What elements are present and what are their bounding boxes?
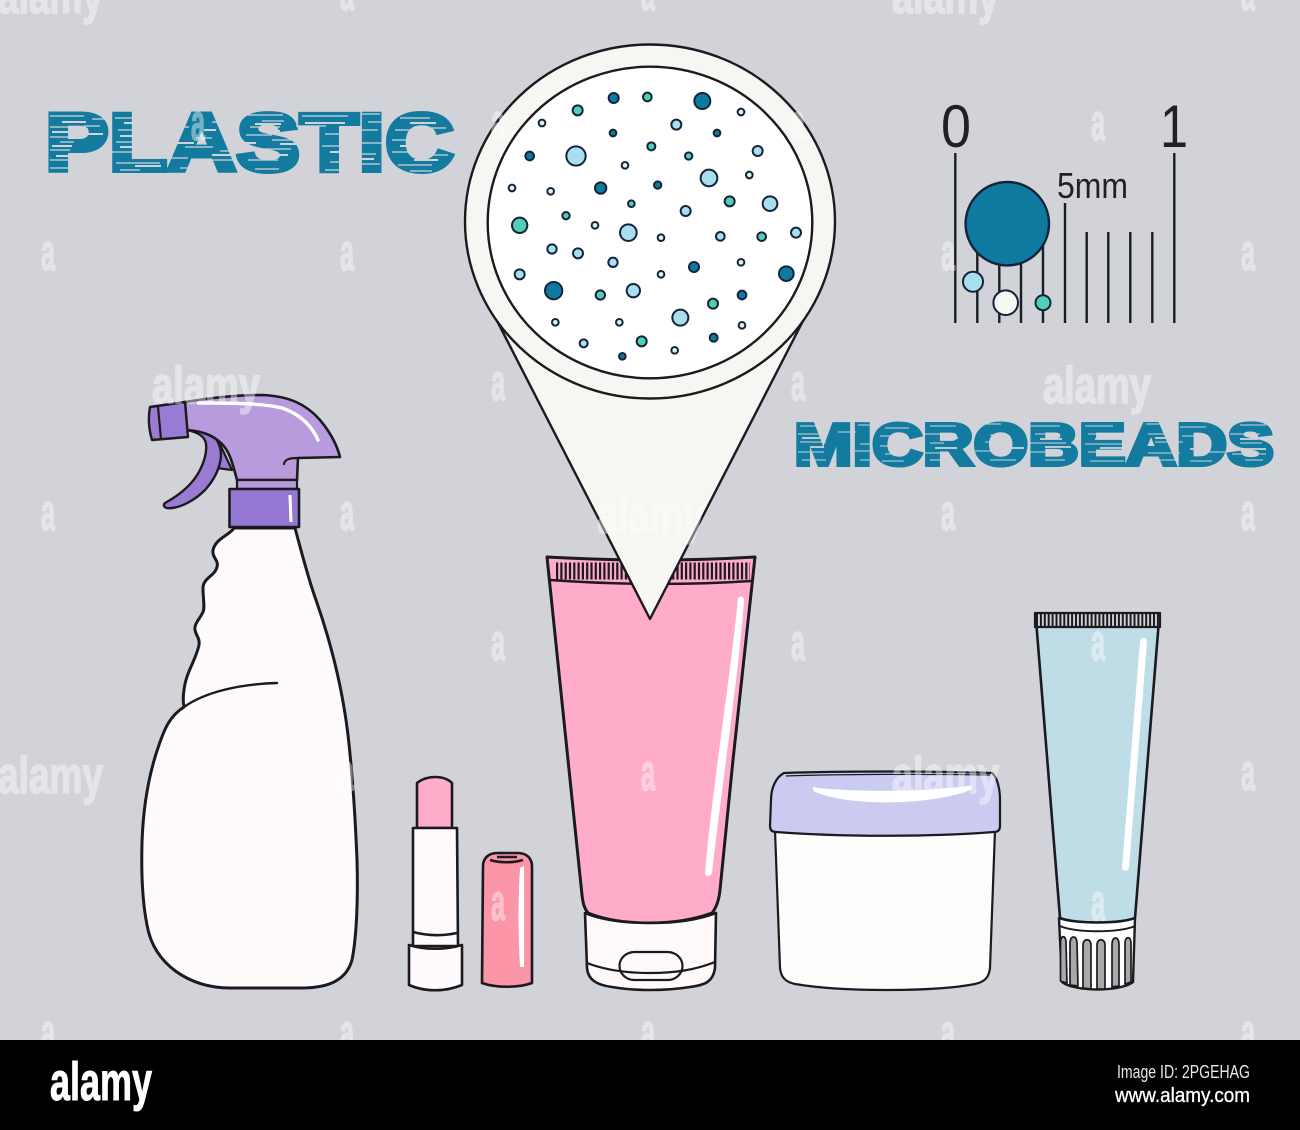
watermark pattern: a [641, 1004, 656, 1062]
lid highlight [813, 786, 972, 802]
trigger lever [164, 428, 221, 508]
watermark pattern: a [191, 94, 206, 152]
footer band [0, 1040, 1300, 1130]
tube cap [585, 913, 716, 990]
watermark pattern: alamy [597, 487, 704, 545]
collar neck [237, 480, 297, 489]
watermark pattern: a [1091, 874, 1106, 932]
watermark pattern: a [941, 484, 956, 542]
ruler tick marks [955, 153, 1174, 323]
watermark pattern: a [491, 614, 506, 672]
watermark pattern: a [791, 94, 806, 152]
toothpaste cap [1059, 918, 1135, 990]
watermark pattern: a [1241, 484, 1256, 542]
watermark pattern: a [340, 484, 355, 542]
tube crimp line [550, 580, 751, 584]
watermark pattern: a [1241, 1004, 1256, 1062]
nozzle [149, 402, 188, 440]
cap opening [490, 857, 523, 862]
tube body [547, 557, 755, 923]
watermark pattern: a [941, 1004, 956, 1062]
scale ruler [941, 93, 1188, 323]
pink tube [547, 557, 755, 990]
watermark pattern: a [641, 744, 656, 802]
teal beads [512, 93, 766, 346]
cap ribs [1060, 937, 1131, 989]
toothpaste crimp [1035, 613, 1160, 627]
stick base [409, 945, 462, 990]
ruler label 0: 0 [941, 93, 971, 160]
title: MICROBEADS: MICROBEADS [794, 412, 1274, 478]
balm bullet [417, 777, 452, 828]
cap ring line [1060, 926, 1135, 931]
watermark pattern: a [1091, 614, 1106, 672]
watermark pattern: a [1241, 744, 1256, 802]
jar body [775, 830, 995, 990]
ruler label 1: 1 [1160, 93, 1188, 160]
watermark pattern: alamy [1043, 357, 1151, 415]
light bead [963, 272, 983, 292]
bottle body [142, 528, 357, 988]
blue toothpaste tube [1035, 613, 1160, 990]
light blue beads [515, 120, 801, 347]
spray bottle [142, 395, 357, 988]
watermark pattern: a [491, 354, 506, 412]
watermark pattern: a [941, 224, 956, 282]
pin pointer [493, 313, 805, 619]
lip balm stick [409, 777, 462, 990]
head highlight [198, 403, 318, 440]
large bead [966, 182, 1049, 265]
tube highlight [705, 597, 744, 876]
watermark pattern: a [1241, 224, 1256, 282]
bottle shoulder line [184, 683, 277, 707]
toothpaste highlight [1122, 638, 1147, 871]
pin outer ring [465, 44, 835, 398]
cap thumb oval [620, 952, 682, 980]
toothpaste body [1036, 626, 1158, 922]
nozzle line [158, 407, 161, 439]
sprayer head [185, 395, 340, 480]
toothpaste crimp ribs [1036, 614, 1159, 626]
cap seam [587, 962, 715, 973]
tube ring line [413, 932, 457, 935]
title: PLASTIC: PLASTIC [45, 98, 454, 188]
magnifier pin [465, 44, 835, 619]
pale beads [509, 109, 753, 354]
cap body [482, 853, 532, 987]
watermark pattern: a [41, 1004, 56, 1062]
head hook line [284, 458, 298, 464]
jar [770, 772, 1000, 990]
tube crimp ribs [556, 562, 750, 580]
teal bead [1036, 295, 1050, 310]
watermark pattern: alamy [892, 747, 999, 805]
watermark pattern: a [791, 354, 806, 412]
ring highlight [288, 495, 292, 522]
dark beads [525, 93, 794, 360]
footer logo: alamy [50, 1052, 152, 1112]
lip balm cap [482, 853, 532, 987]
jar lid [770, 772, 1000, 836]
watermark pattern: a [791, 614, 806, 672]
watermark pattern: a [491, 94, 506, 152]
trigger back piece [217, 440, 232, 470]
stick tube [413, 828, 458, 946]
watermark pattern: a [41, 484, 56, 542]
watermark pattern: a [340, 744, 355, 802]
watermark pattern: alamy [0, 747, 103, 805]
watermark pattern: a [1091, 94, 1106, 152]
screw ring [230, 489, 299, 527]
lid rim line [786, 774, 990, 776]
website: www.alamy.com [1114, 1085, 1250, 1107]
ruler label 5mm: 5mm [1057, 165, 1128, 206]
watermark pattern: alamy [152, 357, 260, 415]
cap highlight [518, 866, 524, 967]
watermark pattern: a [491, 874, 506, 932]
white bead [993, 290, 1018, 315]
watermark pattern: a [340, 1004, 355, 1062]
watermark pattern: a [41, 224, 56, 282]
pin inner lens [488, 67, 812, 378]
image id: Image ID: 2PGEHAG [1117, 1062, 1250, 1082]
watermark pattern: a [340, 224, 355, 282]
microbeads [509, 93, 801, 360]
